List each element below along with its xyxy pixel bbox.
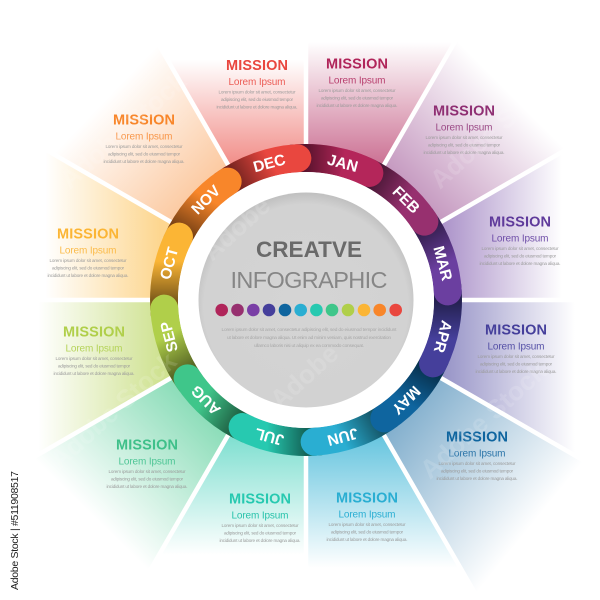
month labels: SEP <box>158 319 182 354</box>
segment: APR <box>419 284 462 377</box>
center title: INFOGRAPHIC <box>230 267 388 293</box>
text block: APR: Lorem Ipsum <box>488 342 544 352</box>
text block: JUN: Lorem Ipsum <box>338 510 396 520</box>
text block: APR: MISSION <box>485 322 547 338</box>
white ring <box>156 150 456 450</box>
watermark: Adobe Stock <box>424 65 563 194</box>
watermark: Adobe Stock <box>44 345 183 474</box>
text block: MAY: adipiscing elit, sed do eiusmod tempor <box>441 468 513 474</box>
text block: DEC: Lorem ipsum dolor sit amet, consectetur <box>218 90 296 94</box>
text block: JAN: Lorem Ipsum <box>328 76 386 86</box>
text block: OCT: Lorem ipsum dolor sit amet, consectetur <box>50 258 127 263</box>
month labels: FEB <box>389 183 423 217</box>
text block: JUN <box>326 490 408 542</box>
watermark: Adobe <box>264 338 344 414</box>
watermark <box>44 65 563 484</box>
segment: OCT <box>150 223 193 316</box>
text block: MAR <box>480 214 560 266</box>
text block: JAN <box>316 56 398 108</box>
text block: FEB: Lorem ipsum dolor sit amet, consectetur <box>426 135 503 140</box>
text block: APR <box>476 322 556 374</box>
text block: JAN: Lorem ipsum dolor sit amet, consectetur <box>318 88 396 93</box>
sector: AUG <box>0 300 306 600</box>
sector: MAY <box>306 300 600 600</box>
segment: MAY <box>365 342 449 445</box>
text block: SEP: adipiscing elit, sed do eiusmod tempor <box>58 364 130 368</box>
text block: MAY: Lorem ipsum dolor sit amet, consectetur <box>438 461 516 466</box>
text block: JUN: MISSION <box>336 490 398 506</box>
center title: CREATVE <box>256 237 362 262</box>
text block: JUL <box>220 492 300 543</box>
text block: FEB: Lorem Ipsum <box>436 122 492 134</box>
segment: DEC <box>214 126 316 210</box>
text block: AUG: Lorem Ipsum <box>118 456 176 468</box>
text block: APR: incididunt ut labore et dolore magna aliqua. <box>476 369 556 374</box>
text block: NOV: incididunt ut labore et dolore magna aliqua. <box>104 159 184 164</box>
text block: MAY: MISSION <box>446 430 508 446</box>
segment: FEB <box>348 157 451 241</box>
text block: FEB: incididunt ut labore et dolore magna aliqua. <box>424 150 504 155</box>
text block: FEB <box>424 104 504 155</box>
text block: FEB: MISSION <box>433 104 495 120</box>
month labels: JAN <box>325 152 360 176</box>
month ring <box>132 126 480 474</box>
text block: OCT <box>48 226 128 278</box>
text block: SEP: incididunt ut labore et dolore magna aliqua. <box>54 371 134 376</box>
text block: DEC <box>216 58 298 110</box>
text block: MAY: incididunt ut labore et dolore magna aliqua. <box>436 476 518 481</box>
text block: JUL: incididunt ut labore et dolore magna aliqua. <box>220 538 300 543</box>
text block: FEB: adipiscing elit, sed do eiusmod tempor <box>428 142 500 148</box>
sector: DEC <box>133 0 306 300</box>
month labels: OCT <box>157 245 182 282</box>
sector: JUN <box>306 300 479 600</box>
text block: MAR: MISSION <box>489 214 551 230</box>
text block: DEC: adipiscing elit, sed do eiusmod tempor <box>221 97 293 102</box>
text block: JUL: Lorem ipsum dolor sit amet, consectetur <box>222 523 299 528</box>
month labels: MAR <box>429 244 455 283</box>
text block: SEP: Lorem ipsum dolor sit amet, consectetur <box>56 356 133 361</box>
text block: NOV: adipiscing elit, sed do eiusmod tempor <box>108 152 180 156</box>
center paragraph: ullamco laboris nisi ut aliquip ex ea commodo consequat. <box>254 343 364 349</box>
segment: JAN <box>290 144 383 187</box>
segment: AUG <box>161 359 264 443</box>
segment: JUL <box>229 413 322 456</box>
text block: OCT: MISSION <box>57 226 119 242</box>
sector: APR <box>306 300 600 470</box>
sector: OCT <box>0 123 306 300</box>
segment: JUN <box>296 390 398 474</box>
month labels: JUN <box>325 424 360 448</box>
month labels: AUG <box>188 382 224 418</box>
text block: NOV <box>104 112 184 164</box>
text block: JUN: Lorem ipsum dolor sit amet, consectetur <box>328 522 406 527</box>
text block: JAN: adipiscing elit, sed do eiusmod tempor <box>321 96 393 100</box>
month labels <box>157 151 455 448</box>
text block: SEP: MISSION <box>63 324 125 340</box>
text block: MAR: Lorem Ipsum <box>492 234 548 244</box>
month labels: MAY <box>388 382 423 418</box>
month labels: JUL <box>253 424 286 448</box>
sector: FEB <box>306 0 600 300</box>
watermark: Adobe Stock <box>54 65 193 194</box>
text block: OCT: incididunt ut labore et dolore magna aliqua. <box>48 273 128 278</box>
text block: APR: adipiscing elit, sed do eiusmod tempor <box>480 362 552 366</box>
text block: JUN: adipiscing elit, sed do eiusmod tempor <box>331 530 403 534</box>
text block: SEP <box>54 324 134 376</box>
month labels: APR <box>430 318 455 355</box>
text block: AUG: Lorem ipsum dolor sit amet, consectetur <box>108 469 186 474</box>
center paragraph <box>222 327 397 349</box>
watermark: Adobe <box>196 190 276 266</box>
text block: NOV: Lorem ipsum dolor sit amet, consectetur <box>106 144 183 149</box>
center title <box>230 237 388 293</box>
month labels: DEC <box>251 151 288 176</box>
text block: AUG <box>106 438 188 489</box>
text block: NOV: Lorem Ipsum <box>116 132 172 142</box>
segment: NOV <box>163 155 247 258</box>
text block: MAR: incididunt ut labore et dolore magna aliqua. <box>480 261 560 266</box>
text block: DEC: Lorem Ipsum <box>228 77 286 88</box>
text block: MAY: Lorem Ipsum <box>448 448 506 460</box>
text block: NOV: MISSION <box>113 112 175 128</box>
color dots <box>215 304 402 316</box>
text block: OCT: Lorem Ipsum <box>60 246 116 256</box>
text block: AUG: adipiscing elit, sed do eiusmod tempor <box>111 476 183 482</box>
text block: JAN: incididunt ut labore et dolore magna aliqua. <box>316 103 398 108</box>
text block: MAY <box>436 430 518 481</box>
text block: OCT: adipiscing elit, sed do eiusmod tempor <box>52 266 124 270</box>
segment: JAN rounded end <box>339 149 383 187</box>
text block: SEP: Lorem Ipsum <box>66 344 122 354</box>
center paragraph: Lorem ipsum dolor sit amet, consectetur adipiscing elit, sed do eiusmod tempor incididunt <box>222 327 397 333</box>
text block: DEC: incididunt ut labore et dolore magna aliqua. <box>216 104 298 110</box>
segment: MAR <box>396 208 480 310</box>
sector: JUL <box>133 300 306 600</box>
sector: NOV <box>0 0 306 300</box>
text block: JAN: MISSION <box>326 56 388 72</box>
text block: AUG: incididunt ut labore et dolore magna aliqua. <box>106 484 188 489</box>
sector: SEP <box>0 300 306 477</box>
watermark: Adobe Stock <box>414 355 553 484</box>
text block: AUG: MISSION <box>116 438 178 454</box>
sector: JAN <box>306 0 479 300</box>
center paragraph: ut labore et dolore magna aliqua. Ut enim ad minim veniam, quis nostrud exercitation <box>227 335 391 341</box>
stock id caption: Adobe Stock | #511908517 <box>9 471 21 590</box>
text block: DEC: MISSION <box>226 58 288 74</box>
month labels: NOV <box>188 182 225 218</box>
sector: MAR <box>306 130 600 300</box>
text block: JUL: adipiscing elit, sed do eiusmod tempor <box>224 530 296 536</box>
text block: JUL: Lorem Ipsum <box>232 510 288 522</box>
text block: JUN: incididunt ut labore et dolore magna aliqua. <box>326 537 408 542</box>
text block: MAR: adipiscing elit, sed do eiusmod tempor <box>484 254 556 258</box>
text block: JUL: MISSION <box>229 492 291 508</box>
segment: SEP <box>132 290 216 392</box>
text block: APR: Lorem ipsum dolor sit amet, consectetur <box>478 354 555 359</box>
center circle <box>178 172 434 428</box>
text block: MAR: Lorem ipsum dolor sit amet, consectetur <box>482 246 559 251</box>
